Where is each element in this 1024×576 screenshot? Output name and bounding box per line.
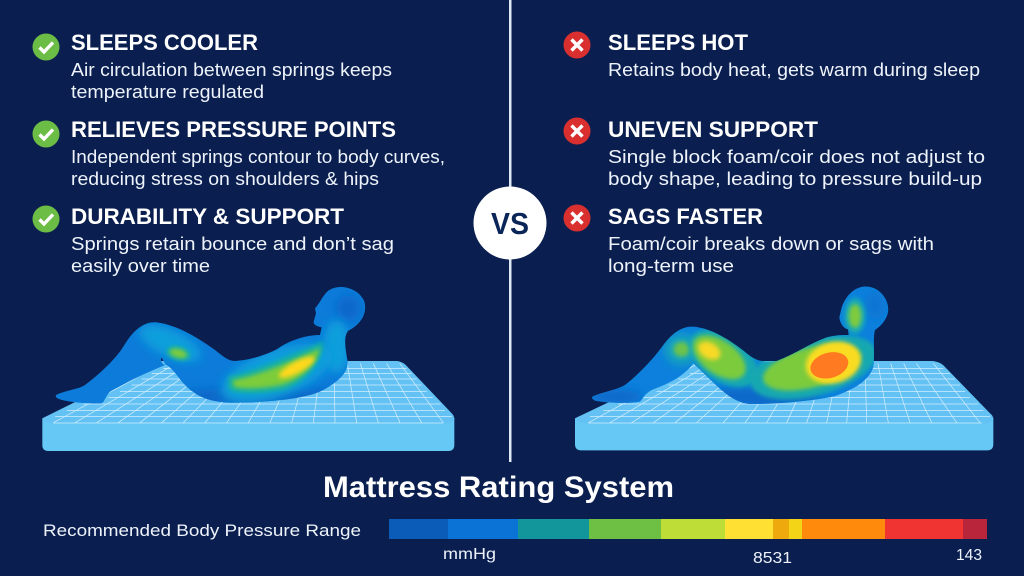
benefit: sleeps cooler: SLEEPS COOLER <box>71 30 258 55</box>
drawback: sags faster: long-term use <box>608 256 734 276</box>
scale labels <box>443 546 982 567</box>
benefit: relieves pressure points: RELIEVES PRESSURE POINTS <box>71 117 396 142</box>
drawback: uneven support: Single block foam/coir does not adjust to <box>608 147 985 167</box>
benefit: sleeps cooler: temperature regulated <box>71 82 264 102</box>
benefit: relieves pressure points <box>32 117 445 189</box>
body heat map <box>592 286 888 404</box>
center divider <box>509 0 512 462</box>
drawback: uneven support: body shape, leading to pressure build-up <box>608 169 982 189</box>
scale labels: 8531 <box>753 550 792 567</box>
VS badge: VS <box>491 206 529 241</box>
panel: pocket spring benefits <box>32 30 445 276</box>
drawback: sags faster <box>564 204 934 276</box>
drawback: sleeps hot: Retains body heat, gets warm during sleep <box>608 60 980 80</box>
benefit: durability and support: easily over time <box>71 256 210 276</box>
label: recommended body pressure range: Recommended Body Pressure Range <box>43 521 361 540</box>
benefit: durability and support <box>32 204 394 276</box>
benefit: durability and support: DURABILITY & SUPPORT <box>71 204 345 229</box>
scale labels: 143 <box>956 547 982 564</box>
benefit: relieves pressure points: reducing stress on shoulders & hips <box>71 169 379 189</box>
benefit: durability and support: Springs retain bounce and don’t sag <box>71 234 394 254</box>
drawback: sags faster: Foam/coir breaks down or sags with <box>608 234 934 254</box>
VS badge <box>474 186 546 260</box>
panel: foam mattress drawbacks <box>564 30 985 276</box>
benefit: relieves pressure points: Independent springs contour to body curves, <box>71 147 445 167</box>
mattress <box>575 361 993 450</box>
drawback: sleeps hot: SLEEPS HOT <box>608 30 749 55</box>
heading: mattress rating system: Mattress Rating System <box>323 471 674 504</box>
illustration: spring mattress with low pressure body map <box>42 280 454 451</box>
pressure scale bar <box>389 519 987 539</box>
drawback: sleeps hot <box>564 30 980 80</box>
benefit: sleeps cooler: Air circulation between springs keeps <box>71 60 392 80</box>
scale labels: mmHg <box>443 546 496 563</box>
benefit: sleeps cooler <box>32 30 392 102</box>
drawback: uneven support <box>564 117 985 189</box>
illustration: foam mattress with high pressure body map <box>575 280 993 450</box>
mattress <box>42 361 454 451</box>
body heat map <box>56 287 366 404</box>
drawback: uneven support: UNEVEN SUPPORT <box>608 117 819 142</box>
drawback: sags faster: SAGS FASTER <box>608 204 763 229</box>
